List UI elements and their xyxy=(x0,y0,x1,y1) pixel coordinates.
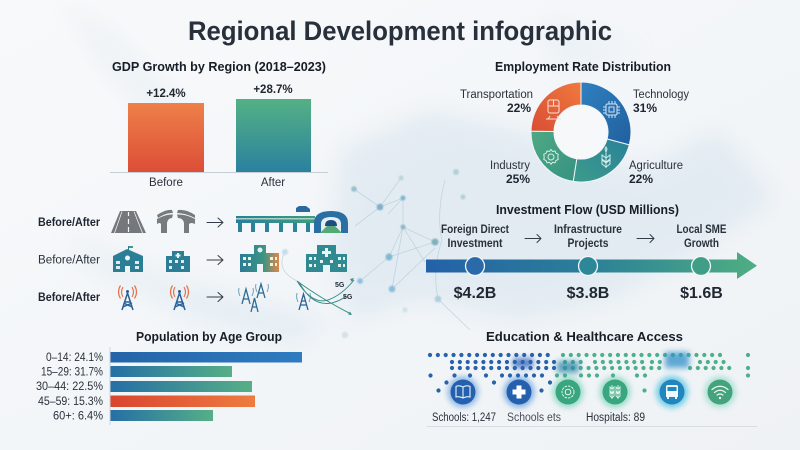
stage: local SME growth: $1.6B xyxy=(680,285,723,302)
row: facilities: Before/After xyxy=(38,254,100,266)
panel: employment rate xyxy=(460,59,689,186)
bar: 45–59: 45–59: 15.3% xyxy=(38,396,103,408)
stage: foreign direct investment: Foreign Direct xyxy=(441,224,509,236)
title: Regional Development infographic xyxy=(188,16,612,46)
label: agriculture xyxy=(629,160,683,186)
icon: car xyxy=(296,206,310,212)
icon: gear xyxy=(552,376,584,408)
bar: before: +12.4% xyxy=(146,88,186,100)
heading: population: Population by Age Group xyxy=(136,329,282,344)
dot matrix xyxy=(430,355,748,390)
stage: infrastructure projects xyxy=(554,224,622,302)
icon: small clinic xyxy=(166,251,190,272)
label: industry: 25% xyxy=(506,172,530,186)
icon: overpass xyxy=(157,210,195,233)
icon: road xyxy=(111,211,146,233)
heading: investment flow: Investment Flow (USD Millions) xyxy=(496,202,679,217)
icon: wheat xyxy=(602,147,610,168)
arrow xyxy=(637,234,654,242)
panel: education and healthcare access xyxy=(427,329,757,426)
arrow xyxy=(207,256,223,264)
stage: local SME growth xyxy=(676,224,727,302)
panel: GDP growth xyxy=(110,59,328,189)
stage: foreign direct investment: $4.2B xyxy=(454,285,496,302)
icon: tunnel xyxy=(314,211,348,233)
icon: bridge xyxy=(236,216,315,232)
bar: 0–14: 0–14: 24.1% xyxy=(46,352,103,364)
row: facilities xyxy=(38,245,347,272)
bar: 0–14 xyxy=(46,352,302,364)
bar: 15–29: 15–29: 31.7% xyxy=(41,366,103,378)
bar: after: After xyxy=(261,177,285,189)
stage: infrastructure projects: Infrastructure xyxy=(554,224,622,236)
bar: 60+: 60+: 6.4% xyxy=(53,410,103,422)
icon: bus xyxy=(656,376,688,408)
flow arrow xyxy=(426,252,757,279)
icon: tower xyxy=(118,286,136,310)
icon: tower cluster xyxy=(239,284,268,312)
label: transportation xyxy=(460,89,533,115)
label: industry xyxy=(490,160,530,186)
icon: book xyxy=(448,376,478,408)
label: technology xyxy=(633,89,689,115)
label: industry: Industry xyxy=(490,160,530,172)
icon: school xyxy=(113,246,143,272)
panel: before/after comparison xyxy=(38,206,354,315)
donut chart xyxy=(531,82,631,182)
row: roads: Before/After xyxy=(38,217,100,229)
stat: garbled label: Schools ets xyxy=(507,412,561,424)
stage: local SME growth: Growth xyxy=(684,238,719,250)
bar: before: Before xyxy=(149,177,183,189)
icon: hospital xyxy=(306,245,347,272)
heading: education: Education & Healthcare Access xyxy=(486,329,683,344)
stat: schools: Schools: 1,247 xyxy=(432,412,496,424)
label: agriculture: 22% xyxy=(629,172,653,186)
stat: hospitals: Hospitals: 89 xyxy=(586,412,645,424)
icon: wheat xyxy=(600,376,630,408)
label: technology: Technology xyxy=(633,89,689,101)
bar: 45–59 xyxy=(38,396,255,408)
stage: foreign direct investment xyxy=(441,224,509,302)
stage: local SME growth: Local SME xyxy=(676,224,727,236)
row: telecom: Before/After xyxy=(38,292,100,304)
glow patches xyxy=(513,352,689,373)
icon: tower with signal xyxy=(170,286,188,310)
icon: 5G network xyxy=(297,278,354,315)
arrow xyxy=(207,292,223,302)
bar: 30–44 xyxy=(36,381,252,393)
heading: GDP growth: GDP Growth by Region (2018–2023) xyxy=(112,59,326,74)
row: telecom xyxy=(38,278,354,315)
icon: 5G network: 5G xyxy=(335,282,345,289)
bar: after xyxy=(236,84,311,189)
panel: investment flow xyxy=(426,202,757,302)
panel: population by age xyxy=(36,329,302,425)
icon: cross xyxy=(504,376,534,408)
stage: infrastructure projects: Projects xyxy=(568,238,608,250)
label: technology: 31% xyxy=(633,101,657,115)
icon: 5G network: 5G xyxy=(343,294,353,301)
bar: 60+ xyxy=(53,410,213,422)
label: transportation: Transportation xyxy=(460,89,533,101)
bar: after: +28.7% xyxy=(253,84,293,96)
icon: wifi xyxy=(704,376,736,408)
bar: 30–44: 30–44: 22.5% xyxy=(36,381,103,393)
stage: foreign direct investment: Investment xyxy=(448,238,503,250)
icon: train xyxy=(546,100,561,119)
row: roads xyxy=(38,206,348,233)
heading: employment: Employment Rate Distribution xyxy=(495,59,671,74)
label: agriculture: Agriculture xyxy=(629,160,683,172)
stage: infrastructure projects: $3.8B xyxy=(567,285,609,302)
bar: before xyxy=(128,88,204,189)
icon: gear xyxy=(544,150,558,164)
arrow xyxy=(207,218,223,227)
icon: chip xyxy=(603,101,620,118)
arrow xyxy=(525,234,541,242)
label: transportation: 22% xyxy=(507,101,531,115)
bar: 15–29 xyxy=(41,366,232,378)
icon: building xyxy=(240,245,279,272)
